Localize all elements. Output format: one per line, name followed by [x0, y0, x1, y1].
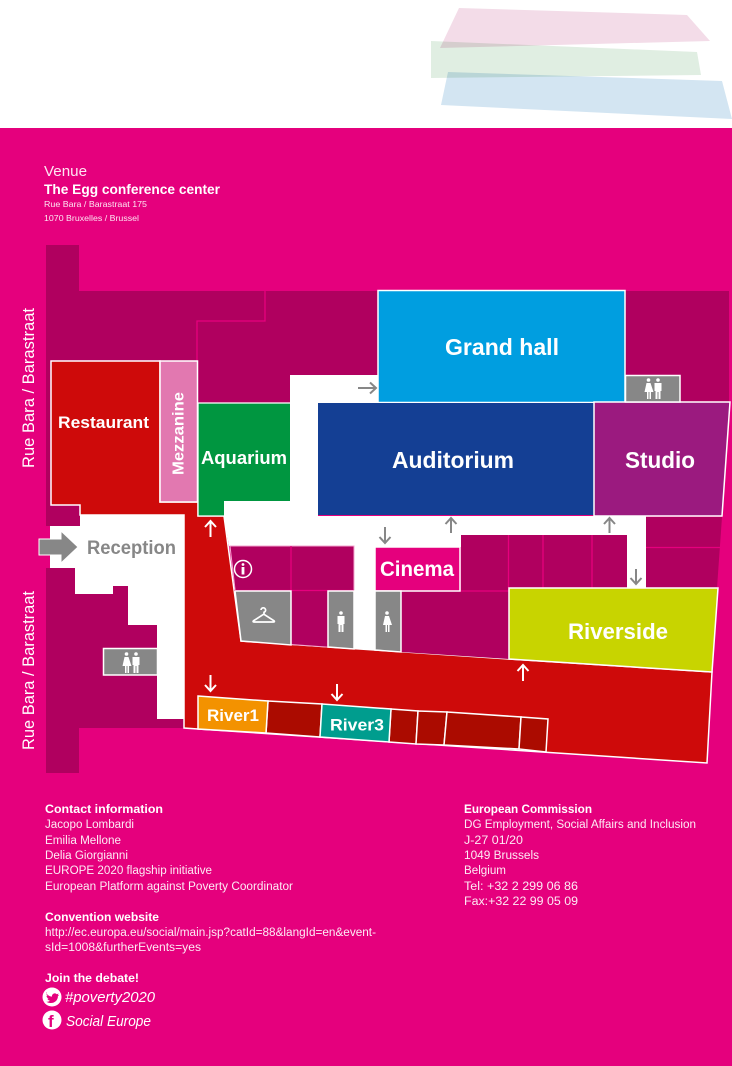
- contact information: [45, 802, 293, 893]
- room: Auditorium: [318, 403, 594, 515]
- european commission address: 1049 Brussels: [464, 850, 539, 862]
- room: Grand hall: Grand hall: [445, 334, 559, 360]
- arrow: to auditorium: [446, 518, 456, 533]
- icon: toilets near reception: [104, 648, 158, 675]
- room: Studio: [594, 402, 730, 516]
- venue heading: Rue Bara / Barastraat 175: [44, 199, 147, 209]
- arrow: to River1: [205, 675, 216, 691]
- street label upper: Rue Bara / Barastraat: [20, 308, 38, 468]
- room: Riverside: Riverside: [568, 619, 668, 644]
- icon: twitter: [42, 988, 62, 1006]
- venue heading: Venue: [44, 163, 87, 180]
- reception label: Reception: [87, 538, 176, 559]
- contact information: EUROPE 2020 flagship initiative: [45, 865, 212, 877]
- side rooms: [230, 517, 722, 659]
- room: Aquarium: [198, 403, 290, 516]
- surrounding building: upper: [46, 245, 729, 526]
- arrow: to aquarium: [205, 521, 216, 537]
- entrance arrow: [39, 531, 78, 563]
- convention website: http://ec.europa.eu/social/main.jsp?catId=88&langId=en&event-: [45, 927, 376, 939]
- icon: information: [234, 560, 252, 578]
- icon: facebook: f: [48, 1012, 54, 1031]
- small rooms row: [266, 701, 548, 752]
- icon: men's toilet: [328, 591, 354, 649]
- room: Mezzanine: [160, 361, 198, 502]
- european commission address: Tel: +32 2 299 06 86: [464, 881, 578, 893]
- join the debate: Social Europe: [66, 1014, 151, 1030]
- red foyer and restaurant: [51, 361, 712, 763]
- room: River3: [320, 704, 391, 742]
- european commission address: J-27 01/20: [464, 835, 523, 847]
- room: River1: River1: [207, 707, 259, 725]
- join the debate: [42, 971, 155, 1031]
- room: River3: River3: [330, 716, 384, 734]
- room: Studio: Studio: [625, 447, 695, 473]
- european commission address: Belgium: [464, 865, 506, 877]
- white corridors: [224, 375, 646, 650]
- contact information: Emilia Mellone: [45, 835, 121, 847]
- room: Cinema: Cinema: [380, 558, 454, 581]
- contact information: Jacopo Lombardi: [45, 819, 134, 831]
- contact information: Contact information: [45, 802, 163, 816]
- join the debate: Join the debate!: [45, 971, 139, 985]
- room: Auditorium: Auditorium: [392, 447, 514, 473]
- arrow: to riverside: [518, 665, 528, 681]
- icon: women's toilet: [375, 591, 401, 652]
- icon: toilets near grand hall: [626, 376, 680, 402]
- arrow: to grand hall: [358, 382, 376, 394]
- floor plan: [39, 245, 730, 773]
- header: translucent ribbons: [431, 8, 732, 119]
- european commission address: European Commission: [464, 802, 592, 816]
- outer partition line: [197, 291, 265, 361]
- reception area: [50, 515, 185, 719]
- room: Grand hall: [378, 290, 625, 402]
- room: River1: [198, 696, 268, 733]
- venue heading: [44, 163, 221, 223]
- convention website: sId=1008&furtherEvents=yes: [45, 942, 201, 954]
- european commission address: DG Employment, Social Affairs and Inclusion: [464, 819, 696, 831]
- room: Aquarium: Aquarium: [201, 447, 287, 468]
- room: Riverside: [509, 588, 718, 672]
- room: Restaurant label: Restaurant: [58, 413, 149, 432]
- venue heading: 1070 Bruxelles / Brussel: [44, 213, 139, 223]
- join the debate: #poverty2020: [65, 990, 155, 1006]
- arrow: to cinema: [380, 527, 390, 543]
- room: Mezzanine: Mezzanine: [170, 392, 188, 475]
- contact information: Delia Giorgianni: [45, 850, 128, 862]
- contact information: European Platform against Poverty Coordinator: [45, 881, 293, 893]
- european commission address: Fax:+32 22 99 05 09: [464, 896, 578, 908]
- arrow: to riverside corridor: [630, 569, 642, 584]
- street label lower: Rue Bara / Barastraat: [20, 591, 38, 750]
- room: Cinema: [375, 547, 460, 591]
- convention website: Convention website: [45, 910, 159, 924]
- arrow: to River3: [332, 684, 342, 700]
- surrounding building: lower: [46, 568, 184, 773]
- european commission address: [464, 802, 696, 908]
- venue heading: The Egg conference center: [44, 182, 221, 197]
- convention website: [45, 910, 376, 954]
- icon: cloakroom: [235, 591, 291, 645]
- arrow: to studio: [604, 518, 615, 533]
